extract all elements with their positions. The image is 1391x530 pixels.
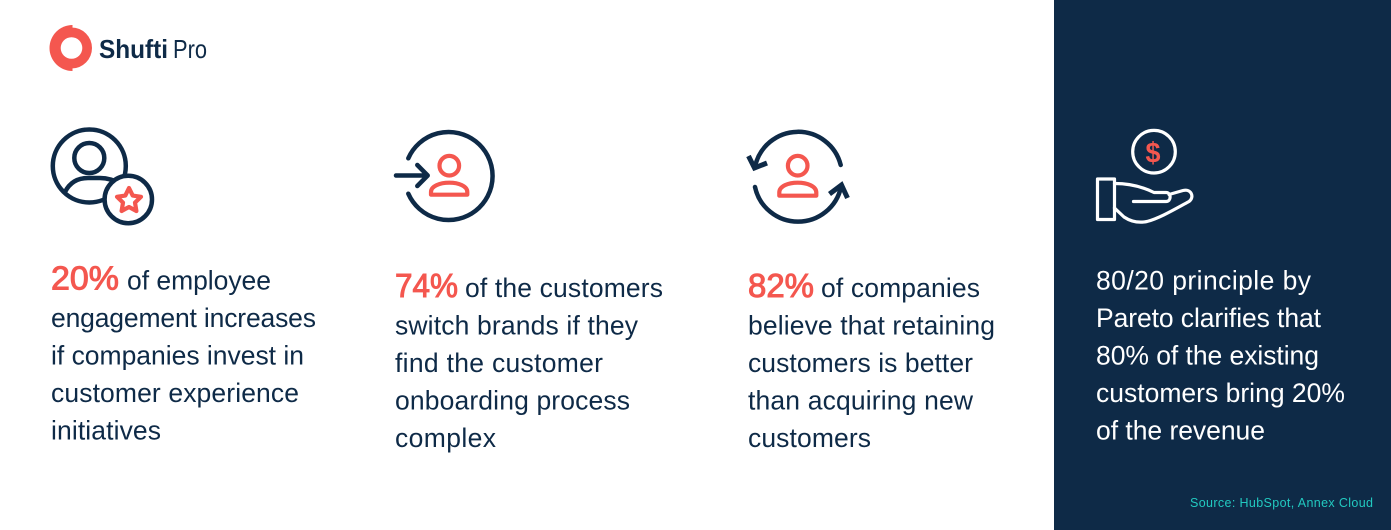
text: 74% customers switch: find the customer [395,348,603,378]
icon: hand holding dollar coin [1098,130,1192,222]
text: 20% employee engagement: if companies invest in [51,340,304,370]
text: 80/20 Pareto principle: customers bring 20% [1096,378,1345,408]
text: 80/20 Pareto principle: Pareto clarifies that [1096,303,1322,333]
icon: person with entry arrow [396,132,493,220]
text: 82% retaining customers: than acquiring new [748,386,974,416]
logo: Shufti Pro: Shufti [99,34,168,64]
text: 80/20 Pareto principle: 80/20 principle by [1096,266,1312,296]
text: 20% employee engagement: of employee [127,266,271,296]
logo: Shufti Pro: Pro [173,34,207,64]
text: 74% customers switch [395,267,663,453]
text: 20% employee engagement: initiatives [51,416,161,446]
text: 74% customers switch: complex [395,423,496,453]
text: 74% customers switch: switch brands if they [395,310,639,340]
logo: Shufti Pro [50,25,207,71]
text: 80/20 Pareto principle [1096,266,1345,446]
source note: Source: HubSpot, Annex Cloud [1190,496,1373,510]
icon: hand holding dollar coin: $ [1146,138,1160,170]
text: 74% customers switch: 74% [395,267,458,304]
icon: person with star [53,130,152,223]
text: 20% employee engagement [51,260,316,446]
text: 20% employee engagement: customer experience [51,378,299,408]
text: 80/20 Pareto principle: 80% of the existing [1096,340,1319,370]
icon: person with retention arrows [748,132,848,222]
text: 20% employee engagement: 20% [51,260,119,296]
text: 74% customers switch: of the customers [465,273,663,303]
text: 82% retaining customers: of companies [821,273,980,303]
text: 82% retaining customers: 82% [748,267,814,304]
text: 20% employee engagement: engagement increases [51,303,316,333]
text: 82% retaining customers: customers [748,423,871,453]
panel: navy sidebar [1054,0,1391,530]
text: 74% customers switch: onboarding process [395,386,630,416]
text: 82% retaining customers: believe that retaining [748,310,995,340]
text: 80/20 Pareto principle: of the revenue [1096,416,1265,446]
text: 82% retaining customers: customers is better [748,348,973,378]
text: 82% retaining customers [748,267,995,453]
